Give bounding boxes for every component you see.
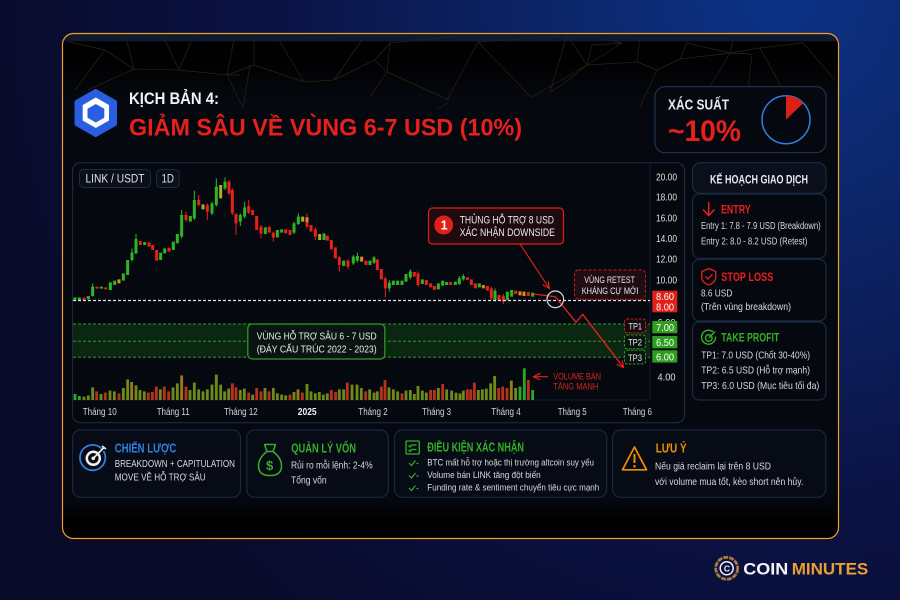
time axis: Tháng 5 bbox=[558, 407, 587, 418]
icon: money bag: $ bbox=[266, 458, 274, 473]
plan card: stop loss: 8.6 USD bbox=[701, 288, 733, 300]
panel: note bbox=[612, 430, 826, 497]
plan header: KẾ HOẠCH GIAO DỊCH bbox=[710, 174, 808, 187]
plan card: take profit: TP3: 6.0 USD (Mục tiêu tối đa) bbox=[701, 380, 819, 392]
volume bars bbox=[75, 368, 533, 400]
panel: money management: QUẢN LÝ VỐN bbox=[291, 440, 356, 455]
timeframe tag bbox=[156, 170, 179, 188]
pie chart bbox=[762, 96, 810, 144]
plan card: entry: Entry 2: 8.0 - 8.2 USD (Retest) bbox=[701, 236, 807, 247]
callout: breakdown of 8 USD: 1 bbox=[441, 218, 448, 232]
panel: confirmation conditions: ĐIỀU KIỆN XÁC NHẬN bbox=[427, 440, 524, 455]
breakdown line at 8 USD bbox=[73, 300, 650, 302]
arrow: callout to breakdown point bbox=[520, 244, 549, 288]
brand logo: MINUTES bbox=[792, 559, 868, 578]
volume annotation: VOLUME BÁN bbox=[553, 371, 601, 381]
plan card: stop loss bbox=[692, 259, 826, 321]
icon: warning triangle bbox=[622, 447, 646, 470]
callout: breakdown of 8 USD bbox=[428, 208, 564, 244]
icon: target with arrow bbox=[80, 445, 106, 470]
panel: confirmation conditions: Volume bán LINK tăng đột biến bbox=[427, 470, 541, 481]
price axis: 20.00 bbox=[656, 171, 677, 183]
time axis: Tháng 12 bbox=[224, 407, 258, 418]
support zone label: VÙNG HỖ TRỢ SÂU 6 - 7 USD bbox=[257, 330, 377, 342]
check marks bbox=[409, 460, 418, 490]
price axis: 4.00 bbox=[658, 371, 676, 383]
panel: strategy: MOVE VỀ HỖ TRỢ SÂU bbox=[115, 471, 206, 484]
price axis bbox=[656, 171, 677, 383]
arrow: projected price path bbox=[533, 294, 623, 367]
panel: probability bbox=[655, 87, 826, 153]
main card bbox=[62, 34, 838, 538]
icon: down arrow bbox=[703, 202, 714, 216]
panel: trading plan bbox=[692, 163, 826, 400]
panel: confirmation conditions: Funding rate & sentiment chuyển tiêu cực mạnh bbox=[427, 483, 599, 494]
panel: note: với volume mua tốt, kèo short nên hủy. bbox=[655, 476, 803, 488]
TP1 tag: TP1 bbox=[628, 322, 642, 332]
support zone bbox=[73, 324, 650, 357]
price tag: 8.60 and 8.00: 8.00 bbox=[656, 301, 674, 313]
plan card: take profit: TAKE PROFIT bbox=[721, 331, 780, 345]
time axis bbox=[83, 407, 652, 418]
heading: scenario label: KỊCH BẢN 4: bbox=[129, 89, 219, 108]
panel: money management: Rủi ro mỗi lệnh: 2-4% bbox=[291, 459, 373, 472]
plan card: stop loss: (Trên vùng breakdown) bbox=[701, 301, 791, 313]
panel: note: Nếu giá reclaim lại trên 8 USD bbox=[655, 460, 771, 472]
panel: note: LƯU Ý bbox=[656, 440, 687, 455]
callout: breakdown of 8 USD: XÁC NHẬN DOWNSIDE bbox=[460, 226, 555, 239]
plan header bbox=[692, 163, 826, 193]
price tag: 7.00: 7.00 bbox=[656, 322, 674, 334]
breakdown marker circle bbox=[547, 291, 564, 308]
price axis: 6.00 bbox=[658, 317, 676, 329]
candlesticks bbox=[75, 177, 533, 304]
header bbox=[76, 89, 522, 142]
panel: strategy: CHIẾN LƯỢC bbox=[115, 440, 176, 455]
probability value: ~10% bbox=[668, 115, 741, 148]
time axis: Tháng 10 bbox=[83, 407, 117, 418]
TP1 tag bbox=[624, 319, 646, 333]
symbol tag: LINK / USDT bbox=[86, 174, 144, 186]
brand logo: COIN bbox=[743, 559, 788, 578]
plan card: entry: Entry 1: 7.8 - 7.9 USD (Breakdown) bbox=[701, 221, 821, 232]
icon: shield bbox=[702, 268, 716, 285]
plan card: take profit: TP1: 7.0 USD (Chốt 30-40%) bbox=[701, 349, 810, 361]
time axis: Tháng 2 bbox=[358, 407, 388, 418]
retest zone box: KHÁNG CỰ MỚI bbox=[582, 286, 638, 296]
time axis: Tháng 3 bbox=[422, 407, 451, 418]
price axis: 10.00 bbox=[656, 274, 677, 286]
logo icon bbox=[716, 557, 738, 579]
probability label: XÁC SUẤT bbox=[668, 96, 729, 114]
price tag: 6.50: 6.50 bbox=[656, 337, 674, 349]
plan card: entry bbox=[692, 194, 826, 258]
plan card: entry: ENTRY bbox=[721, 202, 751, 216]
panel: money management: Tổng vốn bbox=[291, 475, 327, 487]
icon: target bbox=[702, 330, 716, 344]
support zone label bbox=[248, 324, 385, 359]
icon: money bag bbox=[258, 444, 282, 476]
timeframe tag: 1D bbox=[162, 174, 174, 186]
price axis: 12.00 bbox=[656, 254, 677, 266]
price tag: 8.60 and 8.00 bbox=[652, 291, 677, 313]
heading: main title: GIẢM SÂU VỀ VÙNG 6-7 USD (10%) bbox=[129, 113, 522, 142]
panel: confirmation conditions: BTC mất hỗ trợ hoặc thị trường altcoin suy yếu bbox=[427, 458, 594, 469]
price axis: 14.00 bbox=[656, 233, 677, 245]
retest zone box: VÙNG RETEST bbox=[584, 275, 635, 285]
callout: breakdown of 8 USD: THỦNG HỖ TRỢ 8 USD bbox=[460, 213, 554, 226]
symbol tag bbox=[80, 170, 150, 188]
icon: checklist bbox=[406, 441, 419, 454]
retest zone box bbox=[574, 270, 646, 299]
brand logo bbox=[716, 557, 868, 579]
panel: strategy bbox=[72, 430, 240, 497]
volume annotation bbox=[534, 371, 601, 391]
TP2 tag bbox=[624, 335, 646, 349]
TP2 tag: TP2 bbox=[628, 338, 642, 348]
TP3 tag bbox=[624, 350, 646, 364]
plan card: take profit: TP2: 6.5 USD (Hỗ trợ mạnh) bbox=[701, 364, 810, 377]
logo icon: C bbox=[724, 564, 730, 574]
plan card: take profit bbox=[692, 322, 826, 400]
panel: money management bbox=[247, 430, 388, 497]
time axis: Tháng 4 bbox=[491, 407, 521, 418]
price axis: 16.00 bbox=[656, 212, 677, 224]
icon: chainlink hexagon bbox=[76, 91, 115, 135]
TP3 tag: TP3 bbox=[628, 353, 642, 364]
time axis: Tháng 6 bbox=[623, 407, 652, 418]
price axis: 18.00 bbox=[656, 192, 677, 204]
panel: confirmation conditions bbox=[394, 430, 607, 497]
time axis: Tháng 11 bbox=[157, 407, 190, 418]
panel: strategy: BREAKDOWN + CAPITULATION bbox=[115, 458, 235, 470]
support zone label: (ĐÁY CẤU TRÚC 2022 - 2023) bbox=[257, 342, 377, 356]
time axis: 2025 bbox=[298, 407, 317, 418]
panel: price chart bbox=[72, 163, 684, 423]
price tag: 6.00: 6.00 bbox=[656, 351, 674, 363]
price tag: 8.60 and 8.00: 8.60 bbox=[656, 291, 674, 303]
volume annotation: TĂNG MẠNH bbox=[553, 381, 598, 391]
plan card: stop loss: STOP LOSS bbox=[721, 270, 773, 284]
